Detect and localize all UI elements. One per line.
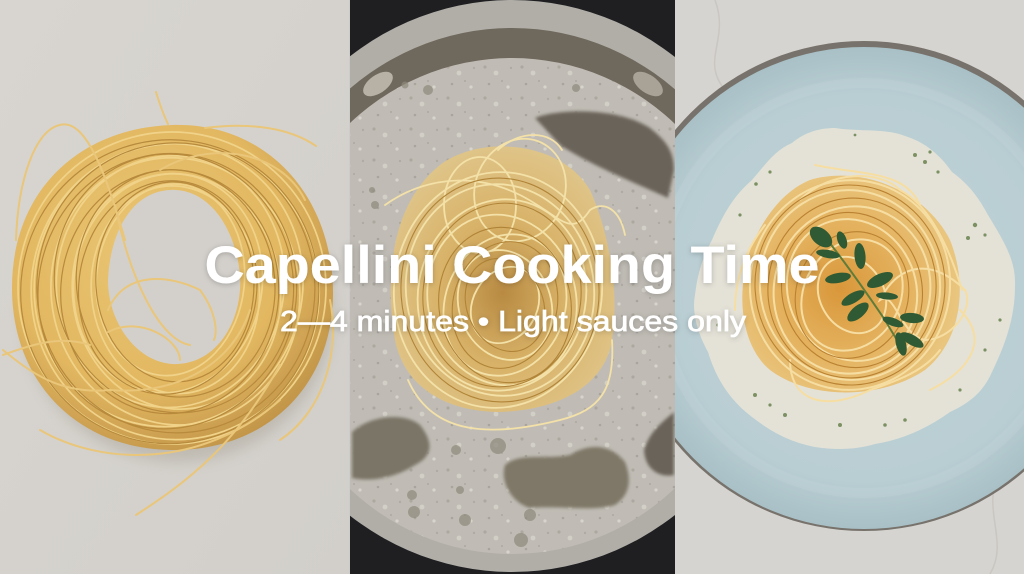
rivets	[363, 72, 663, 96]
water openings	[352, 111, 674, 508]
herb sprig	[806, 223, 926, 357]
panel: boiling pot	[350, 0, 675, 574]
subtitle: 2—4 minutes • Light sauces only	[280, 306, 747, 338]
large bubbles	[369, 82, 580, 547]
panel: dry capellini	[0, 0, 349, 574]
nest hole background	[108, 190, 240, 364]
plated pasta	[735, 165, 974, 403]
panel: plated capellini	[675, 0, 1024, 574]
plate	[675, 41, 1024, 531]
title: Capellini Cooking Time	[204, 236, 819, 295]
boiling water	[350, 58, 675, 554]
cooking pasta	[382, 126, 625, 430]
cream sauce	[694, 128, 1015, 449]
herb flecks	[716, 134, 1002, 427]
marble veins	[715, 0, 1000, 574]
pot inner wall	[350, 28, 675, 124]
pot rim	[350, 0, 675, 572]
nest shadow	[33, 284, 336, 466]
dry pasta nest	[1, 92, 338, 515]
